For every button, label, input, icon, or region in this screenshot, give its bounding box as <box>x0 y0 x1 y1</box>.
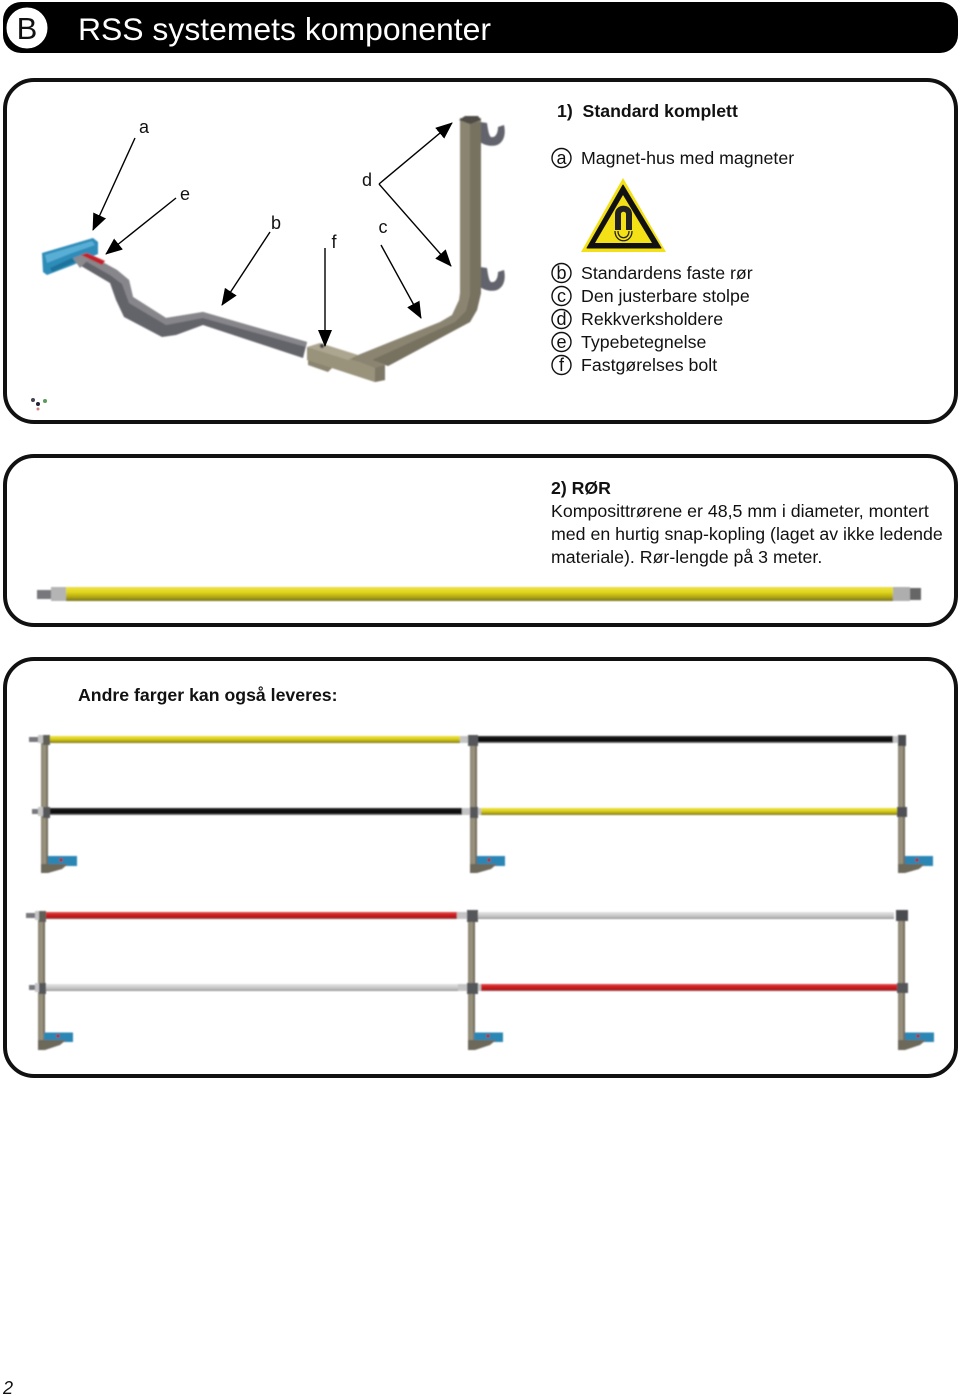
legend b-f: d <box>556 309 567 329</box>
legend b-f: Typebetegnelse <box>581 332 706 352</box>
railing: red and white <box>26 910 934 1050</box>
legend b-f: c <box>557 286 566 306</box>
section badge B: B <box>17 11 37 46</box>
legend a: a <box>556 148 567 168</box>
magnet housing <box>42 238 98 275</box>
part labels: c <box>378 217 388 237</box>
posts <box>41 735 905 873</box>
heading and description: med en hurtig snap-kopling (laget av ikke ledende <box>551 524 943 544</box>
legend b-f: b <box>556 263 567 283</box>
section badge B <box>6 6 48 50</box>
legend b-f: Fastgørelses bolt <box>581 355 717 375</box>
railing: yellow and black <box>29 735 933 873</box>
bracket illustration <box>42 116 505 382</box>
red label <box>81 253 105 265</box>
yellow pipe <box>37 587 921 601</box>
sleeve <box>308 355 385 382</box>
legend b-f: f <box>559 355 565 375</box>
panel: andre farger <box>5 659 956 1076</box>
posts <box>38 911 905 1050</box>
panel: standard komplett <box>5 80 956 422</box>
arrows <box>93 123 452 346</box>
stolpe <box>358 118 481 366</box>
legend b-f: e <box>556 332 567 352</box>
gray tube <box>76 253 307 358</box>
panel: rør <box>5 456 956 625</box>
hooks <box>480 122 505 291</box>
icon: magnet warning <box>581 178 666 252</box>
legend a: Magnet-hus med magneter <box>581 148 794 168</box>
tube end <box>73 253 92 268</box>
legend b-f: Rekkverksholdere <box>581 309 723 329</box>
heading and description: materiale). Rør-lengde på 3 meter. <box>551 547 822 567</box>
heading and description: Komposittrørene er 48,5 mm i diameter, montert <box>551 501 929 521</box>
heading: 1) Standard komplett <box>557 101 738 121</box>
legend b-f: Standardens faste rør <box>581 263 753 283</box>
couplings <box>26 910 908 994</box>
part labels: f <box>331 232 337 252</box>
title: RSS systemets komponenter <box>78 11 491 47</box>
heading: Andre farger kan også leveres: <box>78 685 338 705</box>
part labels: b <box>271 213 281 233</box>
part labels: a <box>139 117 150 137</box>
legend b-f <box>552 263 753 375</box>
couplings <box>29 735 907 818</box>
part labels: d <box>362 170 372 190</box>
part labels <box>139 117 388 252</box>
heading and description <box>551 478 943 567</box>
legend b-f: Den justerbare stolpe <box>581 286 750 306</box>
header bar <box>3 2 958 53</box>
part labels: e <box>180 184 190 204</box>
heading and description: 2) RØR <box>551 478 611 498</box>
magnet feet <box>41 856 933 873</box>
small axis marker <box>31 398 47 410</box>
magnet feet <box>38 1032 934 1050</box>
